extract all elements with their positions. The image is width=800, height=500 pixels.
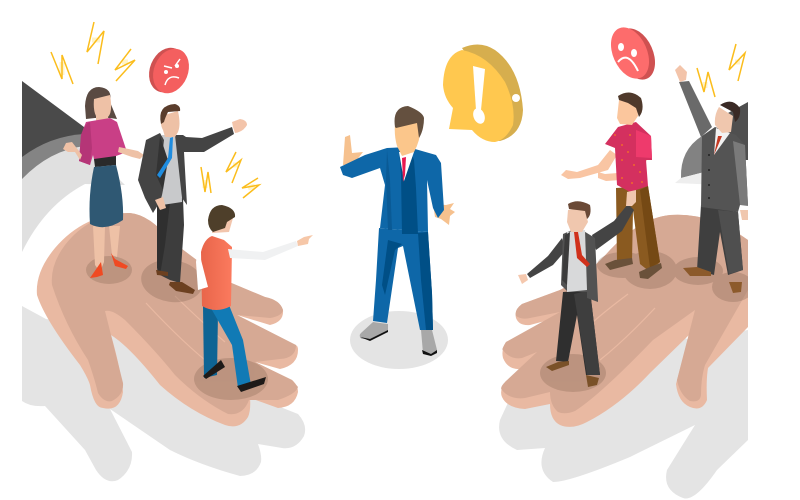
shirt bbox=[162, 135, 182, 205]
face bbox=[715, 107, 733, 133]
person: man in grey suit with blue tie bbox=[138, 104, 247, 294]
orange shirt bbox=[201, 236, 232, 310]
shirt and tie bbox=[399, 152, 414, 181]
lower arm bbox=[196, 248, 208, 290]
person: man in three-piece suit with raised arm bbox=[675, 65, 748, 293]
person: man in dark suit with red tie, front right bbox=[518, 190, 636, 387]
legs bbox=[93, 226, 105, 272]
shirt bbox=[605, 122, 652, 192]
shirt bbox=[567, 230, 587, 292]
trousers bbox=[157, 198, 184, 283]
trousers bbox=[697, 205, 743, 275]
left sleeve cuff bbox=[22, 81, 125, 252]
trousers bbox=[616, 186, 660, 272]
jacket bbox=[701, 127, 748, 212]
raised arm bbox=[679, 81, 712, 137]
back hair bbox=[85, 87, 117, 119]
shoes bbox=[546, 361, 569, 371]
raised arm bbox=[592, 204, 634, 250]
shoes bbox=[605, 258, 633, 270]
palm and fingers base bbox=[37, 213, 298, 426]
right hand bbox=[501, 215, 748, 427]
raised hand bbox=[626, 190, 636, 206]
raised hand bbox=[675, 65, 687, 82]
shoes bbox=[203, 360, 225, 379]
jacket bbox=[561, 230, 598, 302]
face and neck bbox=[94, 95, 112, 120]
jacket bbox=[340, 147, 444, 232]
shoes bbox=[360, 322, 388, 339]
person: man in red patterned shirt bbox=[561, 92, 662, 279]
skirt bbox=[90, 165, 123, 227]
warning speech bubble bbox=[443, 44, 523, 142]
shoe soles bbox=[360, 330, 388, 341]
red tie bbox=[574, 232, 590, 267]
person: man in orange shirt pointing bbox=[196, 205, 313, 392]
shoes bbox=[156, 270, 168, 276]
lightning bolts left group bbox=[51, 22, 259, 198]
palm shade bbox=[501, 215, 748, 413]
shoes bbox=[683, 267, 711, 276]
legs bbox=[203, 306, 218, 378]
hand bbox=[740, 210, 748, 220]
shirt and red tie bbox=[714, 128, 730, 155]
shirt pattern bbox=[614, 134, 643, 184]
lightning bolts right group bbox=[697, 44, 745, 97]
neck and face bbox=[395, 122, 421, 156]
right hand bbox=[433, 203, 455, 225]
blue tie bbox=[157, 137, 173, 178]
raised hand bbox=[232, 119, 247, 133]
hair bbox=[395, 106, 424, 138]
hair bbox=[720, 102, 740, 122]
hair bbox=[160, 104, 180, 124]
arm bbox=[118, 147, 144, 159]
foot shadows bbox=[86, 251, 754, 400]
sad emoji badge bbox=[603, 21, 663, 86]
hair bbox=[568, 201, 591, 219]
floor shadow bbox=[350, 311, 448, 369]
left raised hand bbox=[343, 135, 363, 165]
palm and fingers base bbox=[501, 215, 748, 427]
hair and head bbox=[212, 218, 233, 233]
trousers bbox=[556, 290, 600, 375]
head bbox=[567, 207, 588, 232]
head bbox=[617, 100, 638, 125]
arms bbox=[561, 150, 617, 179]
palm shade bbox=[52, 213, 298, 414]
belt bbox=[94, 156, 116, 167]
hand on hip bbox=[155, 197, 166, 210]
buttons bbox=[708, 154, 710, 199]
white sleeve bbox=[228, 241, 298, 260]
hair bbox=[618, 92, 643, 117]
jacket bbox=[138, 133, 164, 213]
lower arm bbox=[527, 238, 566, 278]
left hand bbox=[37, 213, 298, 426]
pointing hand bbox=[297, 235, 313, 246]
person: mediator in blue suit bbox=[340, 106, 455, 369]
right sleeve cuff bbox=[675, 102, 748, 185]
hand bbox=[518, 274, 528, 284]
pink top bbox=[79, 118, 127, 165]
head bbox=[161, 111, 180, 137]
red heels bbox=[90, 262, 103, 278]
person: woman in pink top bbox=[63, 87, 144, 278]
angry emoji badge bbox=[149, 48, 189, 94]
right hand shadow bbox=[499, 330, 748, 498]
left hand shadow bbox=[22, 306, 305, 481]
trousers bbox=[373, 228, 433, 330]
